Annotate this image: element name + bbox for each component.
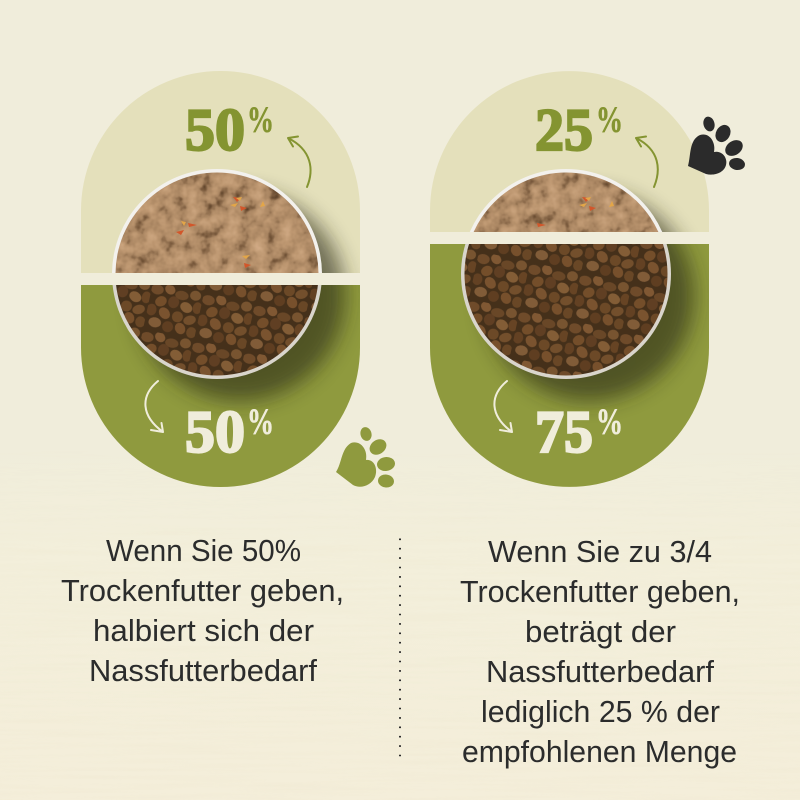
percentage: 50% dry: % [247,402,274,443]
text: left caption: Wenn Sie 50% [106,533,301,568]
percentage: 50% wet: % [247,100,274,141]
text: right caption [460,534,740,769]
percentage: 50% dry: 50 [185,399,245,465]
bowl shadow lower [129,285,356,412]
text: right caption: Trockenfutter geben, [460,574,740,609]
percentage: 50% wet [185,97,274,163]
panel: 25/75 split capsule [430,71,709,487]
text: right caption: Wenn Sie zu 3/4 [488,534,712,569]
text: right caption: empfohlenen Menge [462,734,737,769]
dry food half of bowl [112,285,322,379]
percentage: 25% wet [535,97,623,163]
bowl shadow upper [608,178,690,232]
panel: 50/50 split capsule [81,71,360,487]
percentage: 25% wet: % [596,100,623,141]
capsule bottom: dry food share [430,244,709,487]
arrow: up to wet share [288,136,311,187]
capsule bottom: dry food share [81,285,360,487]
capsule top: wet food share [81,71,360,273]
icon: green paw [336,426,396,489]
divider: dotted line [399,538,401,758]
text: left caption: halbiert sich der [93,613,314,648]
icon: dark paw [688,115,746,175]
arrow: down to dry share [494,381,512,432]
text: right caption: Nassfutterbedarf [486,654,714,689]
arrow: down to dry share [145,381,163,432]
percentage: 50% dry [185,399,274,465]
percentage: 75% dry: 75 [535,399,593,465]
percentage: 25% wet: 25 [535,97,593,163]
text: right caption: lediglich 25 % der [481,694,720,729]
text: right caption: beträgt der [525,614,676,649]
percentage: 75% dry [535,399,623,465]
wet food half of bowl [112,169,322,273]
bowl shadow lower [478,244,705,412]
text: left caption: Trockenfutter geben, [61,573,344,608]
percentage: 50% wet: 50 [185,97,245,163]
dry food part of bowl [461,244,671,379]
text: left caption [61,533,344,688]
wet food part of bowl [470,169,662,232]
arrow: up to wet share [636,136,658,187]
percentage: 75% dry: % [596,402,623,443]
text: left caption: Nassfutterbedarf [89,653,317,688]
bowl shadow upper [260,178,358,273]
capsule top: wet food share [430,71,709,232]
